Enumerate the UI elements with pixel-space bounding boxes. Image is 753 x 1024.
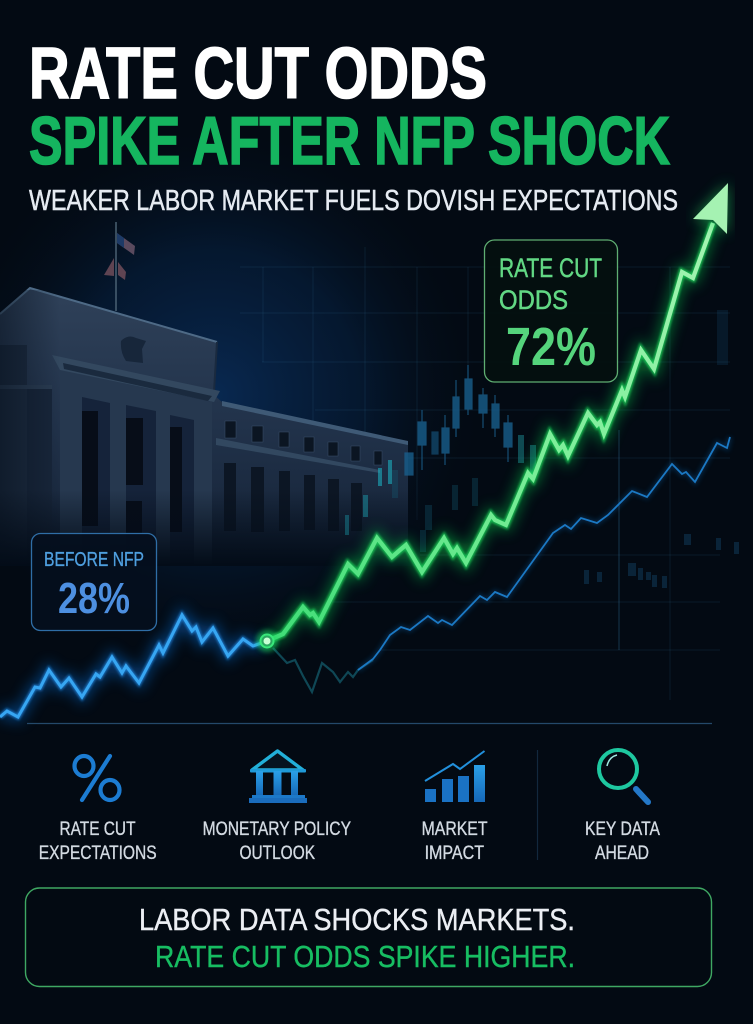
callout: before NFP 28%: BEFORE NFP bbox=[44, 549, 144, 571]
title line 1: RATE CUT ODDS bbox=[29, 34, 487, 114]
building main mass bbox=[0, 288, 408, 565]
callout: rate cut odds 72% bbox=[484, 240, 618, 382]
portico bbox=[52, 355, 220, 565]
blue line: before NFP bbox=[0, 615, 267, 717]
label: key data ahead: KEY DATA bbox=[585, 819, 660, 840]
bottom callout banner bbox=[26, 888, 712, 986]
title bbox=[29, 34, 670, 179]
label: market impact: MARKET bbox=[422, 819, 488, 840]
bottom fade overlay bbox=[0, 490, 420, 566]
label: rate cut expectations: RATE CUT bbox=[60, 819, 136, 840]
label: rate cut expectations: EXPECTATIONS bbox=[39, 843, 157, 864]
bottom callout banner: RATE CUT ODDS SPIKE HIGHER. bbox=[155, 939, 575, 974]
secondary blue line bbox=[273, 437, 730, 692]
flagpole and flags bbox=[104, 222, 135, 311]
label: market impact bbox=[422, 819, 488, 864]
icon: percent bbox=[74, 756, 120, 800]
callout: before NFP 28% bbox=[32, 534, 156, 630]
arrowhead bbox=[693, 183, 728, 234]
east wing with windows bbox=[216, 401, 408, 532]
label: market impact: IMPACT bbox=[425, 843, 484, 864]
label: monetary policy outlook bbox=[203, 819, 351, 864]
icon: magnifying glass bbox=[599, 750, 648, 802]
candlesticks bbox=[345, 310, 739, 588]
background chart grid bbox=[240, 247, 730, 700]
callout: before NFP 28%: 28% bbox=[58, 574, 130, 623]
divider line bbox=[27, 722, 712, 724]
green line: rate cut odds spike bbox=[267, 183, 728, 641]
Federal Reserve building bbox=[0, 222, 420, 566]
left wing bbox=[0, 288, 217, 565]
label: rate cut expectations bbox=[39, 819, 157, 864]
callout: rate cut odds 72%: ODDS bbox=[499, 285, 568, 315]
icon: central bank temple bbox=[249, 751, 307, 803]
callout: rate cut odds 72%: 72% bbox=[506, 317, 596, 377]
eagle statue bbox=[121, 337, 146, 363]
label: key data ahead bbox=[585, 819, 660, 864]
callout: rate cut odds 72%: RATE CUT bbox=[499, 253, 602, 283]
label: key data ahead: AHEAD bbox=[595, 843, 649, 864]
transition point marker bbox=[256, 630, 278, 715]
bottom callout banner: LABOR DATA SHOCKS MARKETS. bbox=[139, 902, 575, 937]
icon: market impact bars bbox=[425, 751, 485, 802]
label: monetary policy outlook: OUTLOOK bbox=[240, 843, 315, 864]
label: monetary policy outlook: MONETARY POLICY bbox=[203, 819, 351, 840]
